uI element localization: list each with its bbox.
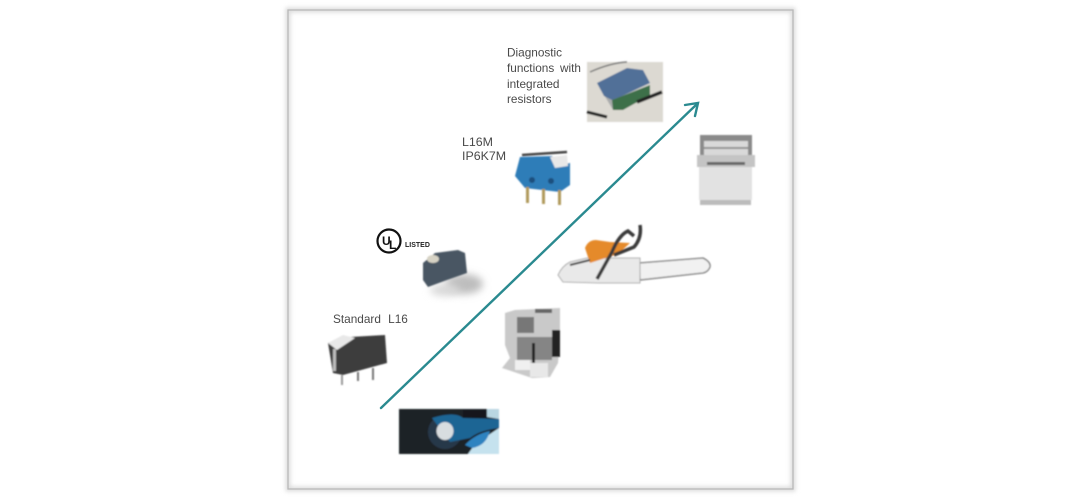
icon: coffee machine	[502, 308, 560, 378]
icon: black standard switch	[328, 335, 387, 385]
text: diagnostic functions: integrated	[507, 77, 559, 91]
icon: UL listed mark	[378, 230, 430, 252]
arrow: rising trend	[381, 103, 698, 408]
icon: chainsaw	[558, 225, 710, 283]
panel: slide frame	[288, 10, 793, 489]
icon: blue L16M switch	[515, 152, 570, 205]
icon: grey switch	[423, 250, 483, 296]
text: diagnostic functions: Diagnostic	[507, 46, 562, 60]
text: L16M label: L16M	[462, 135, 493, 149]
icon: dishwasher	[697, 135, 755, 205]
text: diagnostic functions: resistors	[507, 92, 552, 106]
icon: UL listed mark: LISTED	[405, 242, 430, 249]
text: Standard L16: Standard L16	[333, 312, 408, 326]
text: L16M label: IP6K7M	[462, 149, 506, 163]
text: diagnostic functions: functions with	[507, 61, 581, 75]
icon: UL listed mark: L	[389, 238, 396, 252]
icon: diagnostic switch photo	[587, 62, 663, 122]
icon: car door handle photo	[399, 409, 499, 454]
icon: UL listed mark: U	[382, 234, 391, 248]
